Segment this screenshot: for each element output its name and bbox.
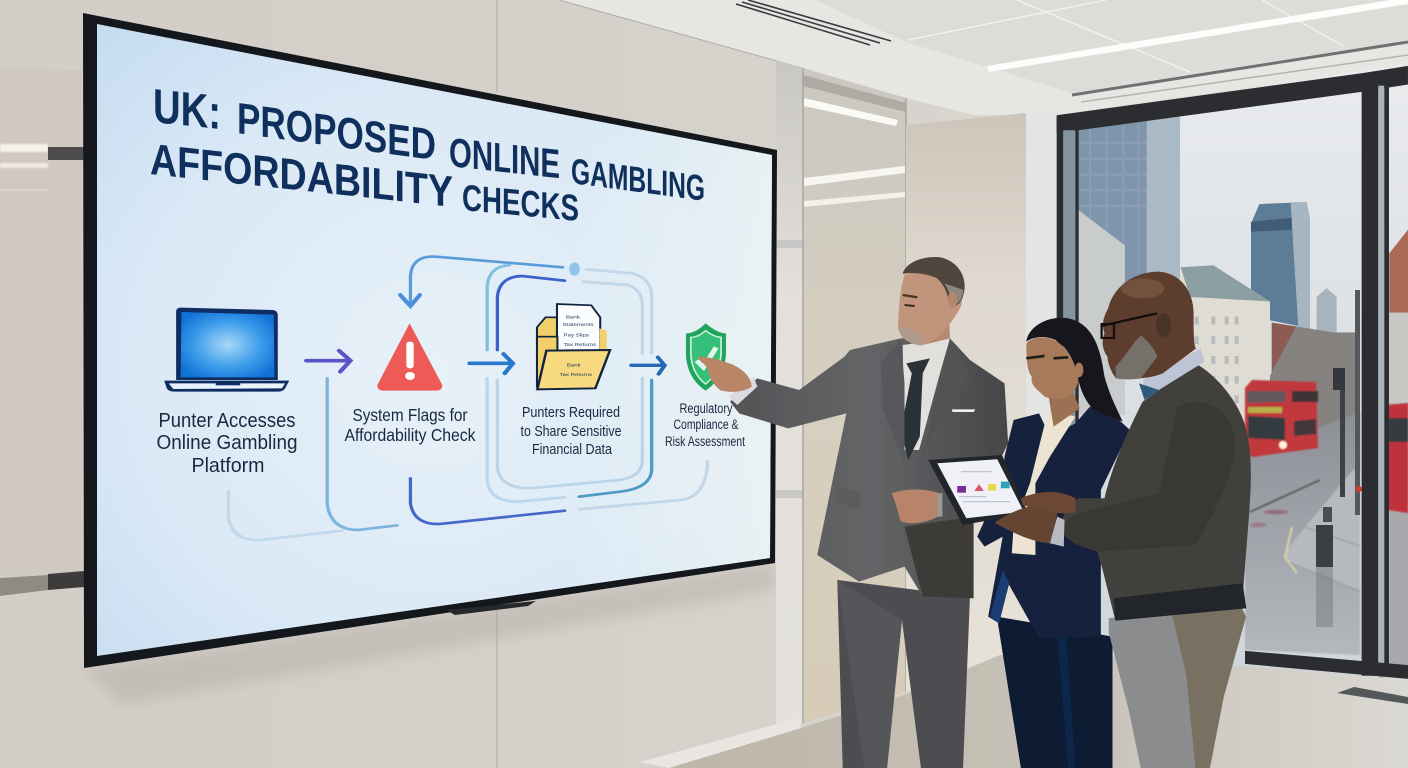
icon: folder with documents: Bank [567, 363, 581, 368]
title [150, 79, 705, 229]
connector node [569, 262, 580, 276]
label: step 4: Risk Assessment [665, 434, 745, 449]
title: GAMBLING [571, 150, 705, 209]
label: step 4 [665, 401, 745, 449]
label: step 3: Punters Required [522, 404, 620, 421]
second red bus [1388, 403, 1408, 513]
side wall [906, 113, 1058, 692]
shadow under screen [84, 563, 775, 705]
icon: folder with documents: Tax Returns [559, 372, 592, 378]
feedback loop lines [228, 257, 708, 540]
pointing hand [697, 357, 757, 405]
column right of screen [776, 60, 803, 730]
floor [669, 655, 1408, 768]
skyline [1057, 64, 1408, 679]
wet street [1245, 412, 1360, 655]
title: UK: [153, 79, 221, 140]
label: step 1 [156, 410, 298, 477]
label: step 1: Platform [192, 455, 264, 477]
ceiling soffit and tiles [559, 0, 1408, 115]
icon: folder with documents: Tax Returns [564, 342, 596, 348]
icon: warning triangle [377, 323, 442, 391]
wall panel seams [497, 0, 802, 768]
man in dark sweater [1061, 272, 1251, 768]
label: step 3 [520, 404, 622, 458]
glass partition [803, 68, 906, 723]
title: PROPOSED [237, 94, 436, 170]
window frame [1057, 66, 1408, 679]
icon: laptop [164, 308, 289, 392]
street furniture [1316, 290, 1362, 627]
arrow 1 [306, 351, 350, 372]
left glass panel with reflections [0, 70, 84, 596]
label: step 3: to Share Sensitive [520, 423, 622, 440]
icon: folder with documents: Pay Slips [564, 333, 589, 338]
screen right-side glow [97, 24, 772, 656]
wall-mounted display screen [83, 13, 777, 668]
window with city view [1057, 64, 1408, 679]
label: step 2 [344, 405, 476, 445]
screen surface [97, 24, 772, 656]
label: step 4: Compliance & [674, 417, 738, 432]
title: CHECKS [462, 176, 579, 229]
label: step 1: Online Gambling [156, 432, 298, 454]
baseboard [640, 718, 801, 768]
man's hands holding tablet [995, 492, 1075, 547]
red double-decker bus [1245, 380, 1318, 457]
label: step 4: Regulatory [680, 401, 733, 416]
label: step 2: Affordability Check [344, 425, 476, 445]
icon: folder with documents: Bank [566, 315, 580, 320]
title: ONLINE [449, 129, 560, 187]
label: step 3: Financial Data [532, 441, 613, 458]
icon: folder with documents [537, 304, 610, 389]
icon: shield with check [686, 323, 726, 391]
label: step 2: System Flags for [352, 405, 468, 425]
stand bar under screen [446, 601, 536, 615]
icon: folder with documents: Statements [563, 322, 594, 328]
process diagram connectors and icons [164, 257, 726, 540]
label: step 1: Punter Accesses [158, 410, 296, 432]
arrow 3 [631, 357, 665, 374]
tablet [928, 455, 1028, 525]
floor vent [1337, 687, 1408, 704]
presenters [697, 257, 1251, 768]
title: AFFORDABILITY [150, 135, 453, 217]
man's clasped hands [892, 490, 943, 523]
woman in navy suit [977, 318, 1130, 768]
man in grey suit [730, 257, 1008, 768]
screen bezel [83, 13, 777, 668]
arrow 2 [470, 354, 513, 373]
